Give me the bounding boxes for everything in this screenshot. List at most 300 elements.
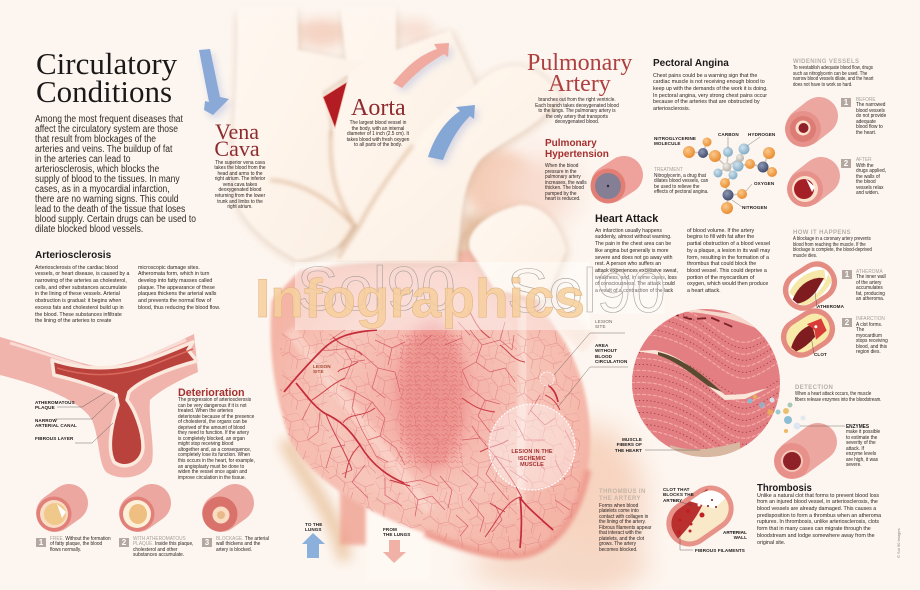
deterioration text: improve circulation in the tissue. [178, 475, 246, 481]
arteriosclerosis column 1: cells, and other substances accumulate [35, 285, 127, 291]
step 3 number: 3 [205, 538, 209, 546]
atheroma number [842, 270, 852, 279]
arteriosclerosis column 1: Arteriosclerosis of the cardiac blood [35, 265, 118, 271]
enzymes text: enzyme levels [846, 451, 876, 457]
heading: widening vessels: WIDENING VESSELS [793, 59, 859, 65]
heading: pectoral angina: Pectoral Angina [653, 58, 729, 69]
aorta text: takes blood with fresh oxygen [347, 137, 409, 143]
thrombosis text: form that in many cases can migrate through the [757, 526, 871, 532]
arteriosclerosis column 1: excess fats and cholesterol build up in [35, 305, 124, 311]
label: nitroglycerine molecule: NITROGLYCERINE [654, 136, 696, 140]
enzymes text [846, 424, 880, 468]
deterioration text: they need to function. If the artery [178, 430, 249, 436]
enzymes text: ENZYMES [846, 424, 869, 430]
aorta text [346, 120, 410, 148]
deterioration text: The progression of arteriosclerosis [178, 397, 251, 403]
artery cross-section with plaque [0, 334, 198, 477]
heart attack column 2: blood vessel. This could deprive a [687, 268, 767, 274]
treatment text: dilates blood vessels, can [654, 178, 708, 184]
deterioration text: treated. When the arteries [178, 408, 233, 414]
label: area without blood circulation: BLOOD [595, 354, 612, 358]
heading: vena cava: Vena [215, 119, 259, 144]
pulmonary artery text: branches out from the right ventricle. [538, 97, 616, 103]
vena cava text: takes the blood from the [214, 165, 266, 171]
deterioration text: is completely blocked, an organ [178, 436, 245, 442]
arteriosclerosis column 1: obstruction is gradual: it begins when [35, 298, 121, 304]
label: lesion site right: SITE [595, 324, 606, 329]
pulmonary hypertension text: When the blood [545, 163, 578, 169]
heart attack column 1: An infarction usually happens [595, 228, 662, 234]
label: lesion in ischemic muscle: MUSCLE [520, 462, 544, 468]
label: atheroma: ATHEROMA [817, 304, 844, 308]
arteriosclerosis column 2: Atheromata form, which in turn [138, 271, 209, 277]
heading: vena cava: Cava [214, 136, 260, 161]
heart attack column 1: severe and does not go away with [595, 254, 672, 260]
lesion site marker [540, 372, 554, 386]
vena cava text: The superior vena cava [215, 160, 265, 166]
step 1 number [36, 538, 46, 546]
how it happens text: muscle dies. [793, 253, 817, 259]
vena cava text: returning from the lower [215, 193, 265, 199]
label: clot: CLOT [814, 352, 827, 356]
pulmonary artery text [535, 97, 619, 125]
label: nitroglycerine molecule [654, 136, 696, 146]
pulmonary hypertension text [545, 163, 587, 202]
after text: the blood [856, 179, 876, 185]
heart attack column 2: by a plaque, a lesion in its wall may [687, 248, 770, 254]
thrombus text [599, 502, 652, 553]
pulmonary artery text: deoxygenated blood. [555, 119, 599, 125]
step 1 caption: of fatty plaque, the blood [50, 541, 102, 547]
arrow: pulmonary blue [428, 105, 475, 160]
label: muscle fibers: FIBERS OF [617, 442, 642, 447]
arteriosclerosis column 1: the blood. These substances infiltrate [35, 312, 122, 318]
step 3 number [202, 538, 212, 546]
heart attack column 1: of consciousness. The attack could [595, 281, 675, 287]
pectoral angina text: Chest pains could be a warning sign that the [653, 72, 757, 78]
aorta text: diameter of 1 inch (2.5 cm). It [347, 131, 409, 137]
arteriosclerosis column 2: and prevents the normal flow of [138, 298, 211, 304]
infarction text: myocardium [856, 333, 882, 339]
how it happens text [793, 236, 872, 259]
heart attack column 1: like angina but generally is more [595, 248, 669, 254]
widening vessels text: such as nitroglycerin can be used. The [793, 71, 867, 77]
step 2 caption: WITH ATHEROMATOUS [133, 536, 186, 542]
before text [856, 96, 886, 136]
thrombosis text [757, 493, 881, 546]
enzymes text: attack. If [846, 446, 864, 452]
before number: 1 [844, 98, 848, 107]
pulmonary hypertension text: pressure in the [545, 169, 577, 175]
vena cava text: right atrium. [227, 204, 253, 210]
treatment text: TREATMENT [654, 167, 683, 173]
intro text: there are no warning signs. This could [35, 194, 178, 204]
heart attack column 2: a heart attack. [687, 288, 721, 294]
thrombosis text: Unlike a natural clot that forms to prevent blood loss [757, 493, 879, 499]
heart attack column 1: attack experiences excessive sweat, [595, 268, 678, 274]
label: lesion in ischemic muscle: ISCHEMIC [518, 456, 546, 462]
after text: vessels relax [856, 185, 884, 191]
before text: the heart. [856, 130, 876, 136]
step 2 caption: PLAQUE. Inside this plaque, [133, 541, 193, 547]
infarction text [856, 316, 888, 355]
pulmonary hypertension text: thicken. The blood [545, 185, 584, 191]
atheroma text: an atheroma. [856, 296, 884, 302]
heart attack column 2: begins to fill with fat after the [687, 234, 754, 240]
label: arterial wall [723, 530, 747, 540]
heart attack column 1: rest. A person who suffers an [595, 261, 661, 267]
stage 2: with plaque [120, 496, 154, 532]
step 2 caption: cholesterol and other [133, 547, 178, 553]
heart attack column 2: thrombus that could block the [687, 261, 756, 267]
aorta text: the body, with an internal [352, 126, 404, 132]
label: nitroglycerine molecule: MOLECULE [654, 141, 681, 146]
heart attack column 1: a result of a contraction of the lack [595, 288, 673, 294]
treatment text [654, 167, 709, 195]
label: clot that blocks the artery: ARTERY [663, 498, 682, 502]
before text: The narrowed [856, 102, 885, 108]
atheroma text: of the artery [856, 280, 881, 286]
step 3 caption: wall thickens and the [216, 541, 260, 547]
label: clot that blocks the artery [663, 486, 694, 502]
detection text: When a heart attack occurs, the muscle [795, 391, 871, 397]
step 1 caption [50, 536, 111, 553]
label: clot that blocks the artery: CLOT THAT [663, 486, 690, 492]
atheroma text: fat, producing [856, 291, 885, 297]
thrombus text: that interact with the [599, 530, 642, 536]
secondary coronary vessels [312, 308, 560, 537]
infarction number: 2 [845, 318, 849, 327]
vena cava text: head and arms to the [217, 171, 263, 177]
heading: pulmonary artery [527, 50, 632, 97]
detection text: fibers release enzymes into the bloodstream. [795, 397, 881, 403]
vena cava text [214, 160, 266, 210]
arteriosclerosis column 1: in the lining of these vessels. Arterial [35, 291, 120, 297]
thrombus text: becomes blocked. [599, 547, 637, 553]
arteriosclerosis column 2: develop into fatty masses called [138, 278, 212, 284]
pulmonary hypertension text: pulmonary artery [545, 174, 581, 180]
label: to the lungs [305, 522, 322, 532]
arteriosclerosis column 2: plaque. The appearance of these [138, 285, 215, 291]
arteriosclerosis column 2: plaques thickens the arterial walls [138, 291, 216, 297]
title: Circulatory [36, 46, 177, 81]
after text: AFTER [856, 157, 872, 163]
label: lesion site right: LESION [595, 318, 612, 324]
label: to the lungs: TO THE [305, 522, 322, 526]
infarction text: blood, and this [856, 344, 887, 350]
heading: vena cava [214, 119, 260, 161]
label: arterial wall: WALL [734, 535, 747, 540]
heart attack column 1: suddenly, almost without warning. [595, 234, 672, 240]
pulmonary hypertension cylinder [590, 168, 626, 204]
deterioration text: an angioplasty must be done to [178, 464, 244, 470]
arteriosclerosis column 2: blood, thus reducing the blood flow. [138, 305, 220, 311]
molecule [683, 137, 777, 214]
thrombosis artery with clot [657, 477, 743, 555]
how it happens text: A blockage in a coronary artery prevents [793, 236, 871, 242]
how it happens text: blockage is complete, the blood-deprived [793, 247, 872, 253]
thrombus text: platelets come into [599, 508, 639, 514]
heading: thrombus in the artery: THE ARTERY [599, 496, 641, 502]
label: area without blood circulation: AREA [595, 342, 608, 348]
arteriosclerosis column 2 [138, 265, 220, 311]
histology circle of muscle fibers [632, 309, 780, 457]
vena cava text: deoxygenated blood [219, 187, 261, 193]
deterioration text: altogether and, as a consequence, [178, 447, 251, 453]
fine capillary network [280, 330, 580, 555]
thrombosis text: bloodstream and lodge somewhere away from the [757, 533, 875, 539]
heart attack column 2 [687, 228, 770, 294]
pectoral angina text: In pectoral angina, very strong chest pains occur [653, 93, 767, 99]
before number [841, 98, 851, 107]
thrombus text: Fibrous filaments appear [599, 525, 651, 531]
heading: thrombus in the artery [599, 488, 646, 502]
step 2 number [119, 538, 129, 546]
heart attack column 1: weakness, and, in some cases, loss [595, 275, 677, 281]
label: area without blood circulation [595, 342, 627, 364]
aorta cut opening [323, 82, 347, 128]
enzymes text: severe. [846, 462, 862, 468]
artery labels: PLAQUE NARROW [35, 405, 57, 422]
arrow: from the lungs [383, 540, 406, 563]
heading: pulmonary hypertension [545, 138, 609, 160]
how it happens text: blood from reaching the muscle. If the [793, 242, 866, 248]
infarction text: INFARCTION [856, 316, 885, 322]
treatment text: be used to relieve the [654, 184, 700, 190]
enzyme particles [748, 395, 806, 433]
thrombosis text: from an injured blood vessel, in arteriosclerosis, the [757, 499, 878, 505]
label: lesion site on heart [313, 364, 331, 374]
pectoral angina text [653, 72, 768, 112]
artery labels [35, 400, 77, 440]
step 3 caption [216, 536, 269, 553]
watermark: Sol90 [507, 257, 666, 326]
heart attack column 2: partial obstruction of a blood vessel [687, 241, 770, 247]
detection text [795, 391, 882, 403]
intro text [35, 114, 196, 234]
aorta text: The largest blood vessel in [350, 120, 406, 126]
after text: With the [856, 163, 873, 169]
vena cava text: vena cava takes [223, 182, 257, 188]
heading: thrombus in the artery: THROMBUS IN [599, 488, 646, 494]
thrombus text: the lining of the artery. [599, 519, 646, 525]
heading: pulmonary hypertension: Hypertension [545, 148, 609, 160]
thrombus text: Forms when blood [599, 502, 638, 508]
label: area without blood circulation: WITHOUT [595, 348, 617, 353]
thrombus text: contact with collagen in [599, 514, 648, 520]
label: lesion in ischemic muscle [511, 449, 553, 468]
infarction artery with clot [774, 301, 842, 365]
aorta text: to all parts of the body. [354, 142, 402, 148]
deterioration text: this occurs in the heart, for example, [178, 458, 255, 464]
label: muscle fibers: THE HEART [615, 448, 642, 452]
thrombosis text: blood vessels are already damaged. This causes a [757, 506, 876, 512]
heart [271, 250, 628, 580]
thrombosis text: ruptures. In thrombosis, unlike arteriosclerosis, clots [757, 519, 879, 525]
heading: deterioration: Deterioration [178, 387, 245, 399]
artery labels: ATHEROMATOUS [35, 400, 75, 404]
widening: before cylinder [785, 111, 821, 147]
before text: blood vessels [856, 108, 885, 114]
step 2 number: 2 [122, 538, 126, 546]
after text: drugs applied, [856, 168, 886, 174]
arteriosclerosis column 1: the lining of the arteries to create [35, 318, 111, 324]
label: area without blood circulation: CIRCULATION [595, 359, 627, 364]
heading: pulmonary artery: Artery [548, 71, 611, 97]
stage 1: free artery [36, 496, 72, 532]
heading: how it happens: HOW IT HAPPENS [793, 230, 851, 236]
pulmonary artery text: the only artery that transports [546, 114, 608, 120]
vena cava text: trunk and limbs to the [217, 199, 263, 205]
arteriosclerosis column 1: vessels, or heart disease, is caused by a [35, 271, 129, 277]
label: arterial wall: ARTERIAL [723, 530, 747, 534]
deterioration text: can be very dangerous if it is not [178, 403, 247, 409]
heading: aorta: Aorta [351, 95, 406, 121]
label: carbon: CARBON [718, 132, 739, 136]
widening vessels text [793, 65, 874, 88]
enzymes text: make it possible [846, 429, 880, 435]
heart attack column 2: portion of the myocardium of [687, 275, 754, 281]
thrombosis text: original site. [757, 540, 785, 546]
heading: pulmonary artery: Pulmonary [527, 50, 632, 76]
label: oxygen: OXYGEN [754, 180, 774, 186]
widening: after cylinder [787, 171, 823, 207]
label: muscle fibers [614, 436, 642, 452]
enzymes text: are high, it was [846, 457, 878, 463]
widening vessels text: does not have to work so hard. [793, 82, 852, 88]
pulmonary artery text: Each branch takes deoxygenated blood [535, 103, 619, 109]
deterioration text [178, 397, 255, 481]
intro text: Among the most frequent diseases that [35, 114, 183, 124]
intro text: supply of blood to the tissues. In many [35, 174, 180, 184]
label: hydrogen: HYDROGEN [748, 132, 775, 136]
label: lesion site on heart: LESION [313, 364, 331, 368]
after text: and widen. [856, 190, 879, 196]
step 3 caption: artery is blocked. [216, 547, 252, 553]
heading: arteriosclerosis: Arteriosclerosis [35, 250, 111, 261]
deterioration text: deteriorate because of the presence [178, 414, 254, 420]
deterioration text: deprived of the amount of blood [178, 425, 245, 431]
arrow: vena cava blue down [199, 49, 229, 115]
heart attack column 1 [595, 228, 678, 294]
title: Conditions [36, 74, 172, 109]
label: nitrogen: NITROGEN [742, 204, 767, 210]
atheroma text [856, 268, 886, 302]
intro text: dilate blocked blood vessels. [35, 224, 143, 234]
intro text: arteriosclerosis, which blocks the [35, 164, 159, 174]
pulmonary hypertension text: pumped by the [545, 191, 577, 197]
heading: detection: DETECTION [795, 385, 833, 391]
thrombus text: platelets, and the clot [599, 536, 644, 542]
pectoral angina text: because of the arteries that are obstructed by [653, 99, 760, 105]
top fade [200, 0, 600, 26]
treatment text: effects of pectoral angina. [654, 189, 709, 195]
deterioration text: of cholesterol, the organs can be [178, 419, 247, 425]
copyright: © Sol 90 Images [896, 528, 901, 558]
deterioration text: widen the vessel once again and [178, 469, 247, 475]
label: from the lungs: FROM [383, 526, 397, 532]
atheroma artery [776, 254, 844, 318]
treatment text: Nitroglycerin, a drug that [654, 173, 706, 179]
after text [856, 157, 886, 196]
enzymes text: to estimate the [846, 435, 877, 441]
intro text: in the arteries can lead to [35, 154, 130, 164]
before text: BEFORE [856, 96, 876, 102]
label: to the lungs: LUNGS [305, 527, 322, 532]
intro text: cases, as in a myocardial infarction, [35, 184, 170, 194]
background washes [285, 16, 650, 590]
heading: heart attack: Heart Attack [595, 213, 658, 225]
step 2 caption: substances accumulate. [133, 552, 184, 558]
watermark: Infographics [255, 267, 585, 329]
thrombus text: grows. The artery [599, 541, 636, 547]
arrow: to the lungs [302, 533, 325, 558]
intro text: that result from blockages of the [35, 134, 156, 144]
watermark: Sol90 [297, 255, 456, 324]
label: from the lungs [383, 526, 410, 537]
infarction text: A clot forms. [856, 322, 882, 328]
tertiary coronary vessels [302, 322, 575, 536]
before text: blood flow to [856, 124, 883, 130]
pectoral angina text: keep up with the demands of the work it is doing. [653, 86, 768, 92]
atheroma text: The inner wall [856, 274, 886, 280]
pectoral angina text: cardiac muscle is not receiving enough blood to [653, 79, 765, 85]
after number [841, 159, 851, 168]
atheroma text: accumulates [856, 285, 883, 291]
vessel creases [270, 130, 467, 262]
step 1 number: 1 [39, 538, 43, 546]
label: muscle fibers: MUSCLE [622, 436, 642, 442]
deterioration text: completely lose its function. When [178, 452, 250, 458]
infarction text: stops receiving [856, 338, 888, 344]
intro text: arteries and veins. The buildup of fat [35, 144, 172, 154]
label: lesion in ischemic muscle: LESION IN THE [511, 449, 553, 455]
pulmonary hypertension text: heart is reduced. [545, 196, 581, 202]
detection vessel [774, 426, 845, 479]
arteriosclerosis column 1: narrowing of the arteries as cholesterol, [35, 278, 127, 284]
intro text: lead to the death of the tissue that loses [35, 204, 185, 214]
step 2 caption [133, 536, 193, 558]
step 1 caption: FREE. Without the formation [50, 536, 111, 542]
heart attack column 2: form, resulting in the formation of a [687, 254, 769, 260]
heart attack column 1: The pain in the chest area can be [595, 241, 671, 247]
arteriosclerosis column 1 [35, 265, 130, 324]
heart attack column 2: oxygen, which would then produce [687, 281, 768, 287]
atheroma number: 1 [845, 270, 849, 279]
widening vessels text: narrow blood vessels dilate, and the heart [793, 76, 873, 82]
after number: 2 [844, 159, 848, 168]
title [36, 46, 177, 109]
heading: pulmonary hypertension: Pulmonary [545, 138, 597, 148]
before text: do not provide [856, 113, 886, 119]
label: fibrous filaments: FIBROUS FILAMENTS [695, 548, 745, 552]
pulmonary artery text: to the lungs. The pulmonary artery is [538, 108, 616, 114]
deterioration text: might stop receiving blood [178, 441, 233, 447]
infarction number [842, 318, 852, 327]
before text: adequate [856, 119, 876, 125]
intro text: blood supply. Certain drugs can be used to [35, 214, 196, 224]
leader lines [645, 292, 817, 550]
label: from the lungs: THE LUNGS [383, 532, 410, 537]
main coronary arteries [284, 330, 558, 548]
atheroma text: ATHEROMA [856, 268, 883, 274]
vena cava text: right atrium. The inferior [215, 176, 265, 182]
stage 3: blocked artery [202, 496, 238, 532]
intro text: affect the circulatory system are those [35, 124, 178, 134]
pulmonary hypertension text: increases, the walls [545, 180, 587, 186]
step 1 caption: flows normally. [50, 547, 81, 553]
heart attack column 2: of blood volume. If the artery [687, 228, 754, 234]
